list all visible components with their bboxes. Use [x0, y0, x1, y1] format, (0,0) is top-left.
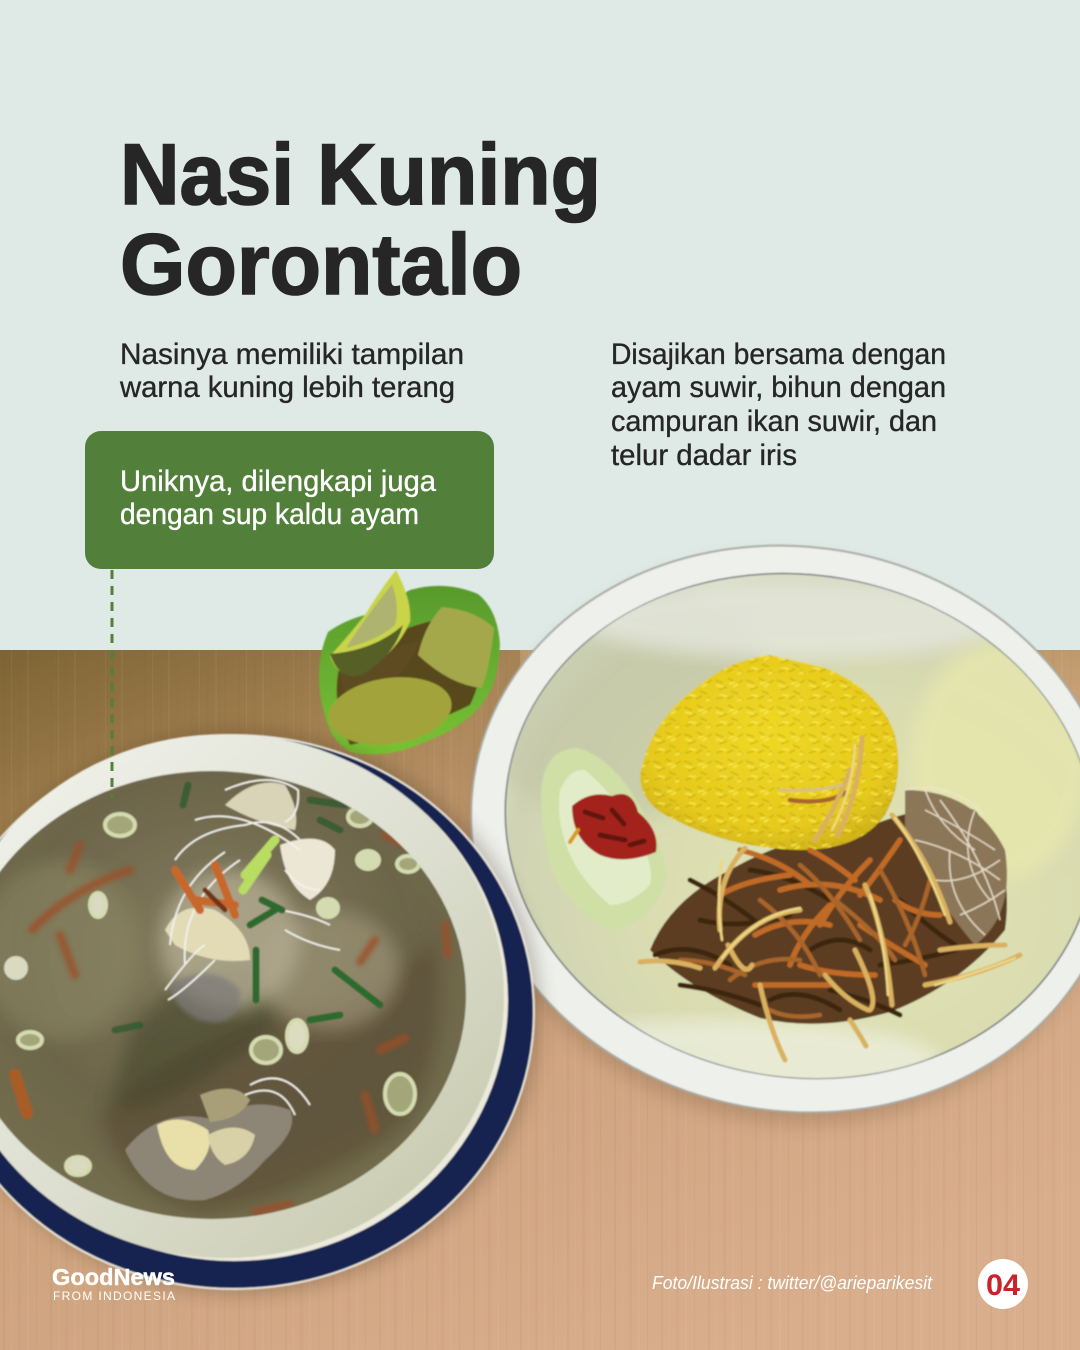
photo: yellow rice plate	[470, 544, 1080, 1114]
text block: side dishes: Disajikan bersama dengan	[611, 338, 946, 371]
food: sambal	[570, 794, 657, 859]
food: noodles	[165, 780, 340, 1115]
text block: rice description: warna kuning lebih terang	[119, 371, 455, 404]
food: cucumber slice	[541, 748, 666, 930]
photo: lime dish	[319, 570, 500, 754]
photo credit: Foto/Ilustrasi : twitter/@arieparikesit	[652, 1273, 933, 1293]
food: fried shreds	[640, 738, 1020, 1060]
food: glass noodles	[905, 788, 1005, 935]
heading: title: Nasi Kuning	[120, 127, 601, 223]
page number badge	[978, 1259, 1028, 1309]
plate shadow	[420, 498, 1080, 1182]
text block: rice description	[119, 338, 464, 404]
icon: lime wedge top	[330, 570, 410, 675]
logo: GoodNews from Indonesia: FROM INDONESIA	[53, 1289, 175, 1303]
food: shredded topping base	[650, 790, 1007, 1024]
heading: title: Gorontalo	[120, 217, 522, 313]
logo: GoodNews from Indonesia: GoodNews	[52, 1264, 175, 1290]
logo: GoodNews from Indonesia	[52, 1264, 175, 1303]
food: chicken chunks	[125, 782, 335, 1200]
food: yellow rice mound	[640, 655, 898, 850]
photo: soup bowl	[0, 734, 534, 1289]
soup plate shadow	[0, 730, 540, 1294]
text block: rice description: Nasinya memiliki tampilan	[120, 338, 464, 371]
arrow: dashed connector to soup	[110, 570, 114, 798]
text block: side dishes: ayam suwir, bihun dengan	[611, 371, 946, 404]
icon: lime wedge right	[418, 607, 494, 688]
background panel	[0, 0, 1080, 650]
food: scallion rings	[4, 808, 419, 1175]
text block: side dishes: telur dadar iris	[611, 439, 797, 472]
heading: title	[120, 127, 601, 313]
callout: soup note: dengan sup kaldu ayam	[120, 498, 419, 531]
text block: side dishes	[611, 338, 946, 472]
wooden table	[0, 650, 1080, 1350]
callout: soup note	[85, 431, 494, 569]
page number badge: 04	[986, 1269, 1020, 1302]
icon: lime wedge bottom	[324, 670, 456, 752]
food: spring onions	[115, 785, 380, 1030]
food: carrot and shallots	[15, 835, 448, 1212]
text block: side dishes: campuran ikan suwir, dan	[611, 405, 937, 438]
callout: soup note: Uniknya, dilengkapi juga	[120, 465, 436, 498]
food: soup contents	[0, 780, 448, 1215]
